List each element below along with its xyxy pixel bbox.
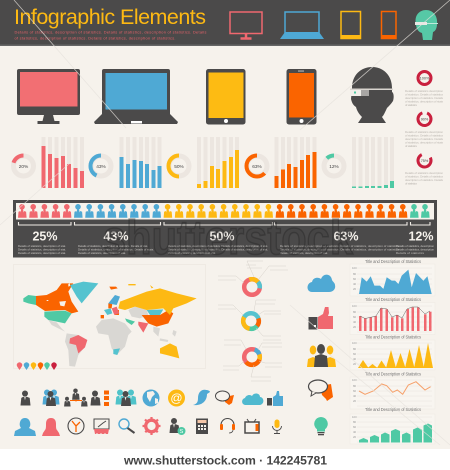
header description: of statistics, description of statistics. Details of statistics, description of statistics.: [14, 36, 175, 40]
band captions: Details of statistics, description of stat.: [18, 251, 66, 255]
icon: woman silhouette: [42, 418, 60, 436]
donut 63%: [246, 156, 268, 176]
band captions: Details of statistics, description of stat.: [18, 244, 66, 248]
bar chart blue: [120, 137, 162, 188]
bar chart red: [42, 137, 84, 188]
icon: man silhouette: [14, 418, 36, 436]
band captions: Details of statistics: [396, 251, 425, 255]
band captions: Details of statistics, description: [396, 248, 434, 252]
chart: red bars with line: 20: [353, 325, 357, 329]
chart: blue area: 80: [353, 272, 357, 276]
small ring stat 75% with caption: description of statistics. Details: [405, 178, 444, 182]
legend pins: [17, 362, 57, 370]
icon: large tablet: [206, 69, 246, 124]
icon: calculator: [196, 418, 208, 434]
chart: orange line: 80: [353, 384, 357, 388]
world map panel: [14, 264, 206, 368]
percentages: 12%: [408, 230, 434, 244]
percentages: 43%: [103, 230, 129, 244]
pink countries: [69, 307, 148, 353]
header icon: phone: [381, 12, 396, 39]
percentages: [32, 230, 434, 244]
chart: yellow peaks: 60: [353, 352, 357, 356]
icon: globe: [142, 390, 160, 406]
orange countries: [36, 283, 173, 327]
small ring stat 100% with caption: of statistics: [405, 103, 418, 107]
band captions: Details of statistics, description: [396, 244, 434, 248]
chart: orange line: 20: [353, 399, 357, 403]
donut 50%: 50%: [174, 164, 185, 170]
header band: [0, 0, 450, 46]
icon: small thumbs up: [267, 391, 283, 406]
chart title: Title and Description of Statistics: [365, 297, 421, 302]
chart: red bars with line: 60: [353, 315, 357, 319]
blue countries: [108, 295, 120, 305]
ring chart 1 with labels: [218, 261, 288, 298]
icon: chat bubbles: [216, 391, 234, 405]
donut 43%: [90, 156, 112, 176]
bar chart yellow: [197, 137, 239, 188]
small ring stat 90% with caption: of statistics. Details of statistics: [405, 134, 444, 138]
header description: Details of statistics, description of statistics. Details of statistics, description of statistics. Details: [14, 30, 207, 34]
bar chart orange: [274, 137, 316, 188]
chart: green columns: 100: [352, 415, 357, 419]
chart: green columns: 60: [353, 425, 357, 429]
people row: green: [410, 204, 430, 218]
band captions: Details of statistics, description of statistics. Details of stats.: [78, 248, 154, 252]
chart: blue area: 20: [353, 287, 357, 291]
icon: headset: [220, 419, 235, 433]
percentages: 63%: [333, 230, 359, 244]
small ring stat 90% with caption: [405, 110, 444, 148]
band captions: Details of statistics, description of statistics. Details of stat.: [78, 244, 148, 248]
bar chart green: [352, 137, 394, 188]
chart: blue area: 40: [353, 282, 357, 286]
icon row 2: [14, 417, 282, 436]
header icon: tablet: [340, 12, 361, 39]
small ring stat 75% with caption: of statistics. Details of statistics: [405, 174, 444, 178]
band captions: Details of statistics, description of statistics. Details of statistics, description of stat.: [168, 248, 268, 252]
donut 43%: 43%: [96, 164, 107, 170]
icon: teal team: [116, 390, 136, 406]
header icon: head with glasses: [415, 10, 438, 40]
percentages: 50%: [209, 230, 235, 244]
percentages: 25%: [32, 230, 58, 244]
gray land: [48, 307, 177, 367]
icon: presentation board: [94, 419, 109, 434]
icon: thumbs up: [308, 307, 333, 330]
chart: green columns: 20: [353, 435, 357, 439]
band captions: Details of statistics, description of stat.: [280, 251, 328, 255]
icon: cloud: [308, 275, 335, 292]
chart: yellow peaks: 40: [353, 357, 357, 361]
band captions: Details of statistics, description of statistics. Details of statistics, description of stat.: [168, 244, 268, 248]
small ring stat 75% with caption: [405, 152, 444, 186]
chart: red bars with line: 40: [353, 320, 357, 324]
ring chart 2 with labels: [218, 300, 281, 340]
chart: blue area: [350, 259, 435, 296]
chart: blue area: 100: [352, 266, 357, 270]
small ring stat 90% with caption: description of statistics. Details: [405, 137, 444, 141]
chart: red bars with line: [350, 297, 435, 334]
icon: speech bubbles: [308, 380, 333, 401]
chart: orange line: [350, 372, 435, 409]
header icon: monitor: [230, 12, 262, 38]
small ring stat 100% with caption: description of statistics. Details: [405, 96, 444, 100]
icon: large laptop: [94, 69, 178, 124]
small ring stat 90% with caption: Details of statistics description: [405, 130, 443, 134]
small ring stat 75% with caption: 75%: [421, 159, 429, 163]
donut 63%: 63%: [252, 164, 263, 170]
chart: orange line: 100: [352, 378, 357, 382]
icon: large head with smart glasses: [350, 67, 394, 123]
icon: large monitor: [17, 69, 80, 124]
chart: red bars with line: 100: [352, 304, 357, 308]
chart title: Title and Description of Statistics: [365, 372, 421, 376]
small ring stat 100% with caption: Details of statistics description: [405, 89, 443, 93]
donut 50%: [168, 156, 190, 176]
people row: red: [18, 204, 71, 218]
donut 12%: 12%: [329, 164, 340, 170]
icon: microphone: [272, 420, 282, 434]
icon: org chart: [64, 388, 88, 407]
icon: light bulb: [314, 417, 328, 435]
band captions: Details of statistics, description of statistics. Details of statistics, description of statistics.: [280, 244, 400, 248]
chart: yellow peaks: 20: [353, 362, 357, 366]
people row: yellow: [164, 204, 273, 218]
ring chart 3 with labels: [223, 340, 282, 381]
title: Infographic Elements: [14, 5, 206, 29]
chart: red bars with line: 80: [353, 310, 357, 314]
chart title: Title and Description of Statistics: [365, 407, 421, 412]
icon row 1: [20, 388, 283, 407]
small ring stat 90% with caption: of statistics: [405, 144, 418, 148]
band captions: Details of statistics, description of stat.: [168, 251, 216, 255]
chart: orange line: 40: [353, 394, 357, 398]
people percentage band: [13, 200, 437, 258]
icon: magnifier: [119, 419, 134, 433]
small ring stat 75% with caption: of statistics: [405, 182, 418, 186]
Canadian islands and lakes: [47, 283, 70, 306]
footer text: www.shutterstock.com · 142245781: [123, 454, 327, 468]
watermark: shutterstock: [103, 212, 353, 265]
icon: business team: [42, 390, 60, 406]
chart: yellow peaks: 80: [353, 347, 357, 351]
small ring stat 75% with caption: Details of statistics description: [405, 171, 443, 175]
donut 20%: 20%: [19, 164, 29, 170]
donut 12%: [324, 156, 344, 176]
chart: green columns: 40: [353, 430, 357, 434]
chart: blue area: 60: [353, 277, 357, 281]
cyan countries: [70, 282, 163, 355]
yellow countries: [118, 284, 197, 358]
small ring stat 100% with caption: of statistics, description of stats: [405, 100, 444, 104]
icon: clock: [68, 418, 84, 434]
small ring stat 100% with caption: 100%: [420, 76, 430, 80]
icon: gear: [142, 417, 160, 435]
icon: at sign: @: [170, 391, 183, 405]
chart: yellow peaks: 100: [352, 341, 357, 345]
people row: orange: [276, 204, 407, 218]
donut 20%: [13, 156, 34, 176]
chart: green columns: [350, 407, 435, 444]
people row: blue: [74, 204, 161, 218]
chart: green columns: 80: [353, 420, 357, 424]
small ring stat 100% with caption: of statistics. Details of statistics: [405, 92, 444, 96]
icon: bird: [193, 390, 210, 405]
icon: businessman: [20, 390, 30, 406]
icon: man with dollar badge: S: [180, 429, 184, 435]
header description: [14, 30, 207, 40]
teal countries: [23, 295, 135, 325]
header icon: laptop: [280, 12, 324, 39]
small ring stat 90% with caption: 90%: [421, 118, 429, 122]
chart: orange line: 60: [353, 389, 357, 393]
chart: yellow peaks: [350, 334, 435, 370]
band captions: Details of statistics, description of stat.: [18, 248, 66, 252]
brackets: [18, 222, 430, 225]
small ring stat 100% with caption: [405, 72, 444, 107]
chart title: Title and Description of Statistics: [365, 334, 421, 340]
band captions: Details of statistics, description of stat.: [78, 251, 126, 255]
icon: business group: [307, 344, 336, 367]
icon: at sign: [168, 390, 185, 406]
icon: small cloud: [242, 393, 263, 405]
small ring stat 90% with caption: of statistics, description of stats: [405, 140, 444, 144]
icon: person with list: [90, 390, 109, 406]
chart title: Title and Description of Statistics: [365, 259, 421, 264]
icon: television: [245, 419, 259, 433]
icon: large phone: [286, 69, 316, 124]
icon: man with dollar badge: [170, 418, 186, 435]
band captions: Details of statistics, description of statistics. Details of statistics, description of statistics.: [280, 248, 400, 252]
band captions: [18, 244, 434, 255]
